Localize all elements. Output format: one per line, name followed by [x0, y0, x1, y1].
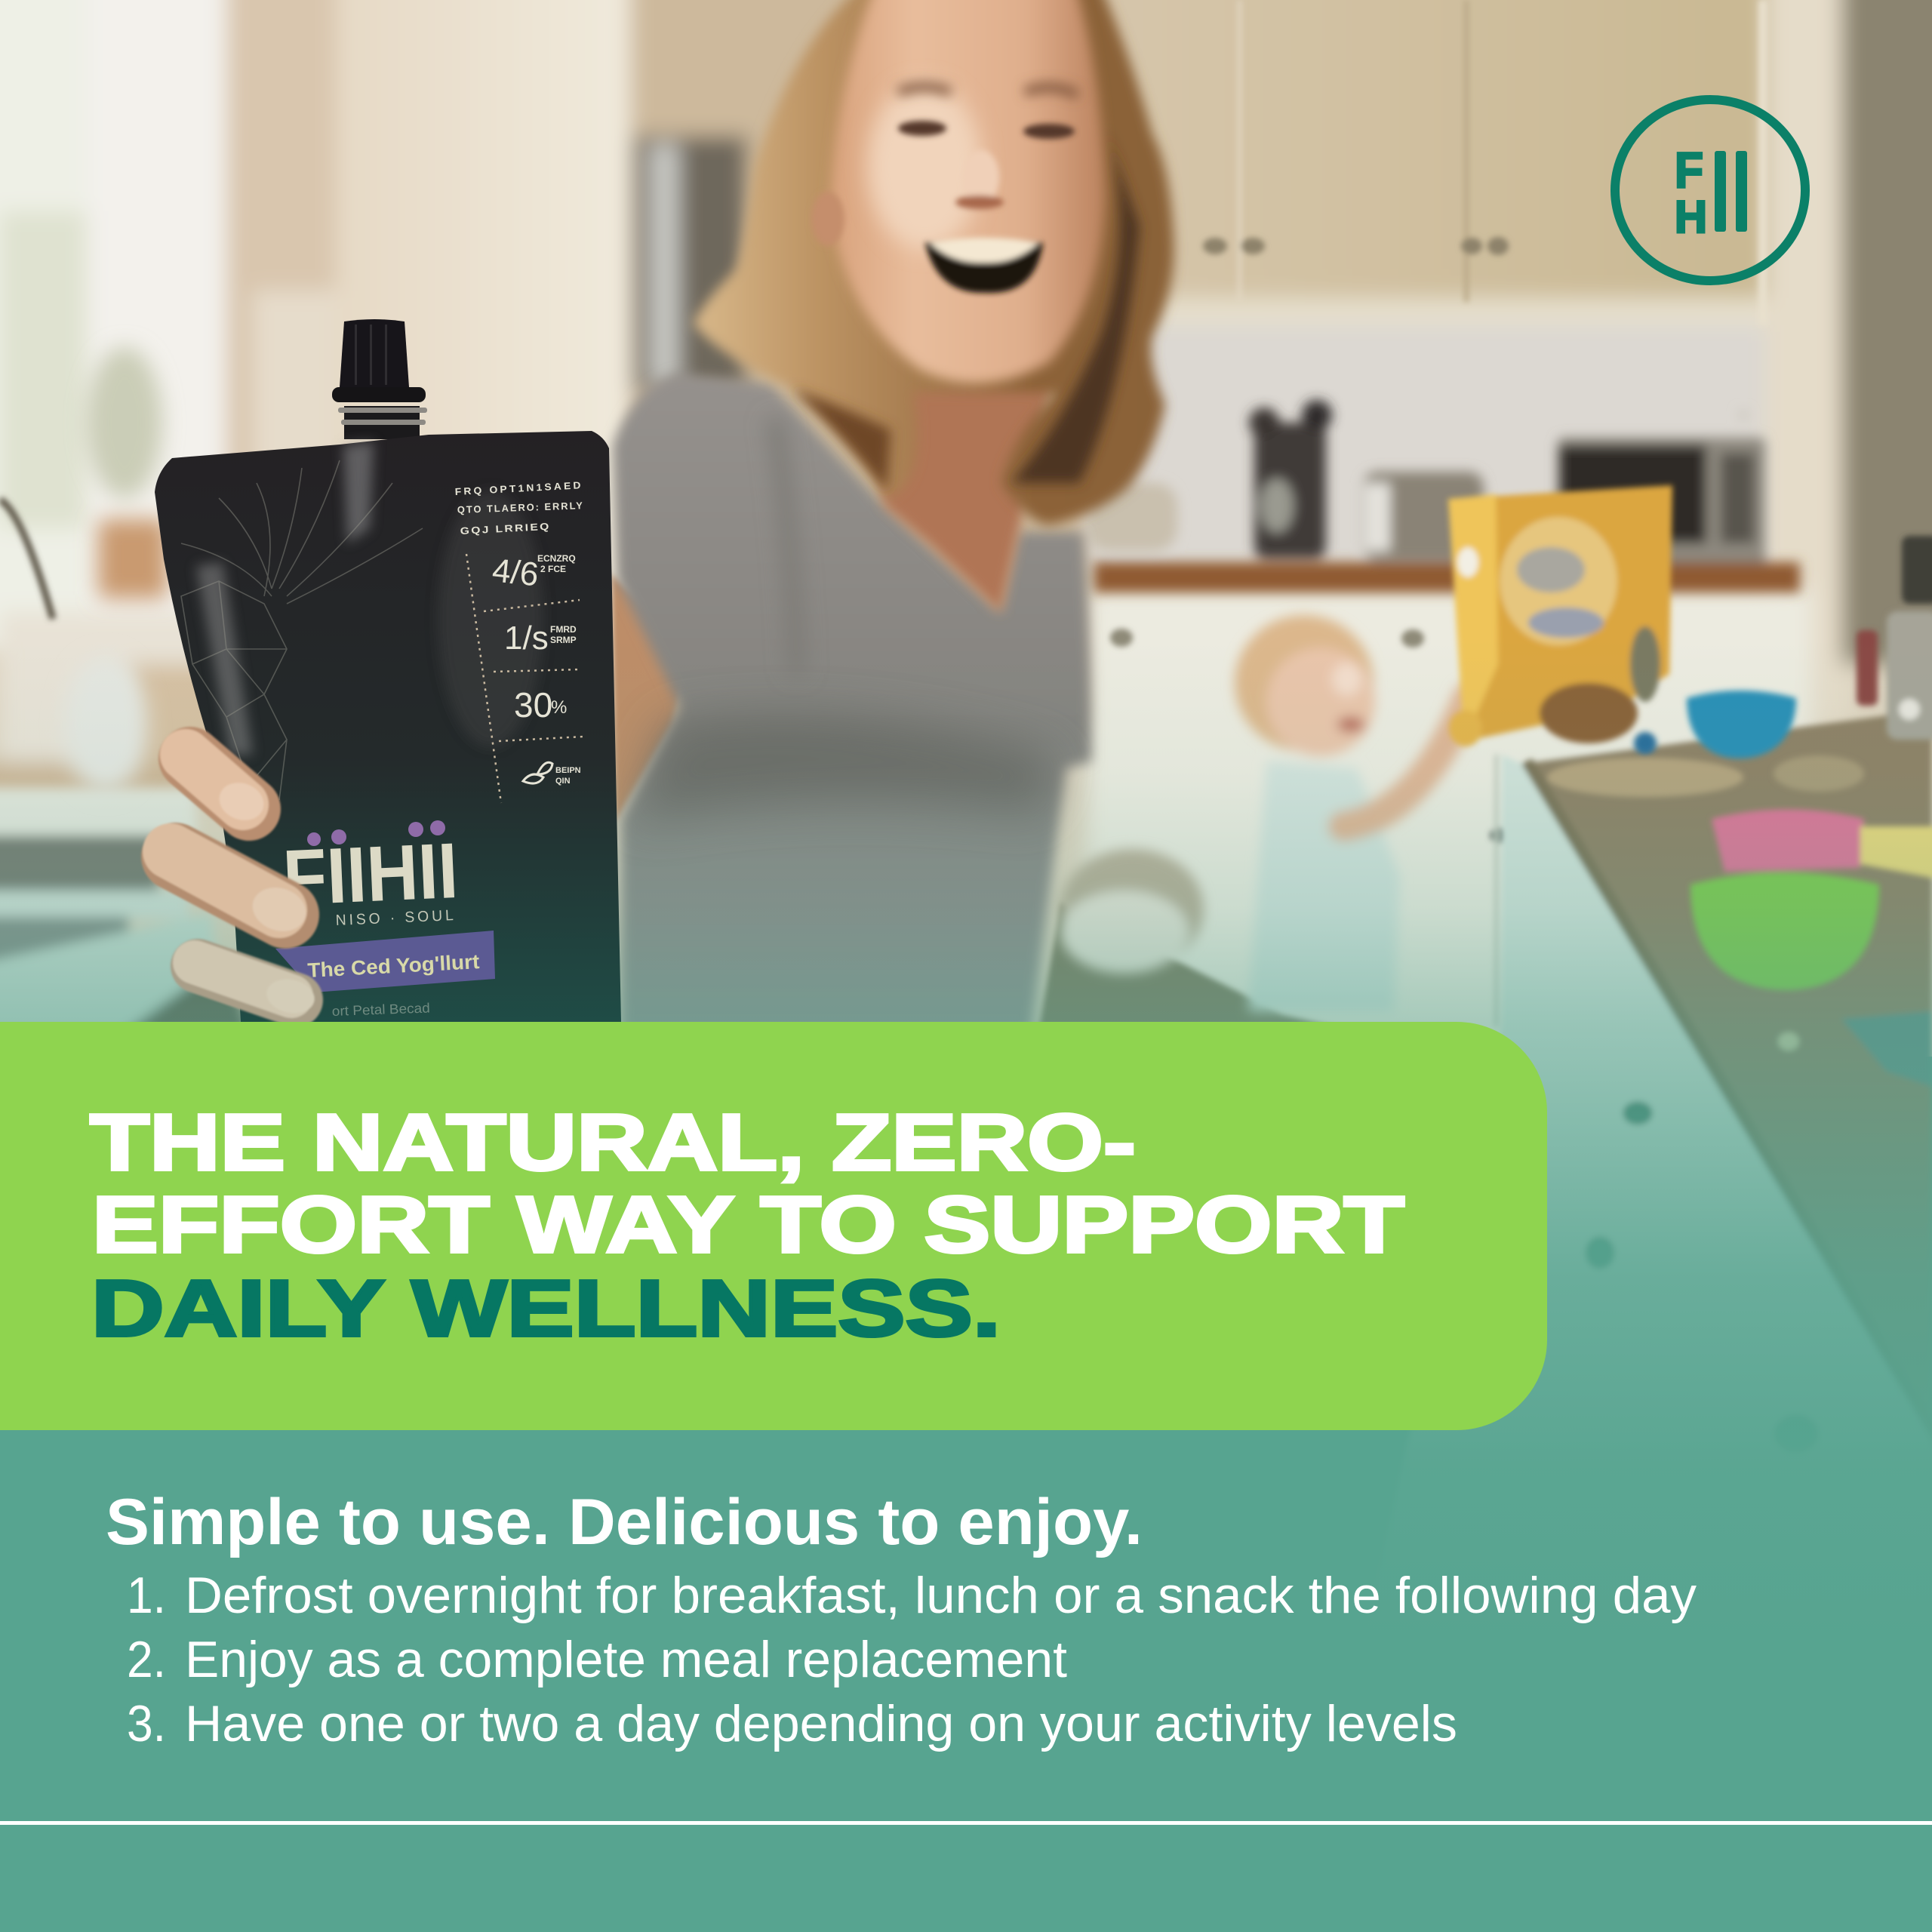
- pouch brand logo: NISO · SOUL: [335, 907, 457, 929]
- shirt: [613, 374, 1091, 1034]
- cereal and bowls on the counter: [1547, 536, 1932, 990]
- pouch small bottom text: ort Petal Becad: [331, 1000, 430, 1019]
- heading: THE NATURAL, ZERO-: [90, 1098, 1136, 1187]
- footer divider line: [0, 1821, 1932, 1825]
- pouch panel text: FMRD: [550, 624, 577, 635]
- pouch spout and cap: [332, 319, 427, 439]
- pouch body: [155, 431, 621, 1022]
- pouch panel text: QTO TLAERO: ERRLY: [457, 500, 584, 515]
- pouch panel text: FRQ OPT1N1SAED: [454, 479, 583, 497]
- pouch panel text: ECNZRQ: [537, 553, 576, 564]
- pouch brand logo: FIIHII: [281, 827, 460, 922]
- arm: [611, 574, 683, 823]
- brows: [898, 87, 1078, 95]
- foreground island counter and cabinet: [1034, 709, 1932, 1660]
- counter appliances: [1087, 400, 1800, 592]
- product pouch held in hand: [155, 319, 621, 1022]
- pouch panel text: 1/s: [504, 620, 549, 657]
- shirt sleeve fold: [775, 418, 797, 674]
- pouch panel text: SRMP: [550, 635, 577, 645]
- cereal box: [1448, 485, 1672, 755]
- pouch panel text: %: [551, 697, 567, 718]
- numbered step 2: 2.: [127, 1631, 166, 1688]
- icon: leaf sprout: [523, 762, 552, 783]
- heading: EFFORT WAY TO SUPPORT: [92, 1180, 1404, 1269]
- panel: green headline banner: [0, 1022, 1547, 1430]
- hand fingers: [171, 755, 318, 1017]
- pouch panel text: GQJ LRRIEQ: [460, 521, 551, 537]
- pouch panel text: [454, 479, 584, 786]
- neck: [868, 362, 1057, 613]
- text block: usage instructions: [106, 1486, 1697, 1752]
- pouch pineapple line art: [181, 460, 423, 800]
- woman: [611, 0, 1174, 1034]
- logo: FH badge: H: [1675, 192, 1707, 242]
- hair right shadow: [1011, 128, 1140, 483]
- nose: [955, 150, 1004, 209]
- logo: FH badge: F: [1675, 142, 1703, 198]
- faucet: [0, 500, 53, 619]
- pouch shine: [196, 441, 543, 755]
- hair: [693, 0, 1174, 525]
- pouch panel text: BEIPN: [555, 766, 581, 775]
- heading: DAILY WELLNESS.: [91, 1264, 1001, 1353]
- child behind the counter: [1060, 615, 1468, 1011]
- numbered step 1: 1.: [127, 1567, 166, 1624]
- sink: [0, 789, 257, 1057]
- numbered step 1: Defrost overnight for breakfast, lunch or a snack the following day: [185, 1567, 1697, 1624]
- laughing mouth: [925, 238, 1043, 293]
- pouch panel text: 30: [514, 685, 552, 724]
- numbered step 3: 3.: [127, 1695, 166, 1752]
- subheading: Simple to use. Delicious to enjoy.: [106, 1486, 1143, 1558]
- pouch panel text: QIN: [555, 777, 571, 786]
- ear: [811, 192, 844, 246]
- face highlight: [868, 83, 981, 249]
- pouch dotted dividers: [466, 554, 583, 803]
- face: [830, 0, 1106, 383]
- logo: FH badge: [1615, 100, 1805, 281]
- hair underside shadow: [792, 389, 891, 491]
- pouch purple flavour label: [275, 931, 495, 992]
- heading: [90, 1098, 1404, 1353]
- pouch purple flavour label: The Ced Yog'llurt: [307, 950, 480, 982]
- window plant and pot: [64, 347, 168, 792]
- numbered step 2: Enjoy as a complete meal replacement: [185, 1631, 1067, 1688]
- numbered step 3: Have one or two a day depending on your activity levels: [185, 1695, 1457, 1752]
- upper cabinet details: [1203, 0, 1767, 325]
- lower cabinets: [1110, 629, 1561, 1026]
- pouch panel text: 2 FCE: [540, 564, 566, 574]
- kitchen backdrop: [0, 0, 1932, 1057]
- shirt shadow: [634, 715, 1057, 823]
- eyes: [898, 121, 1075, 139]
- pouch panel text: 4/6: [491, 552, 540, 593]
